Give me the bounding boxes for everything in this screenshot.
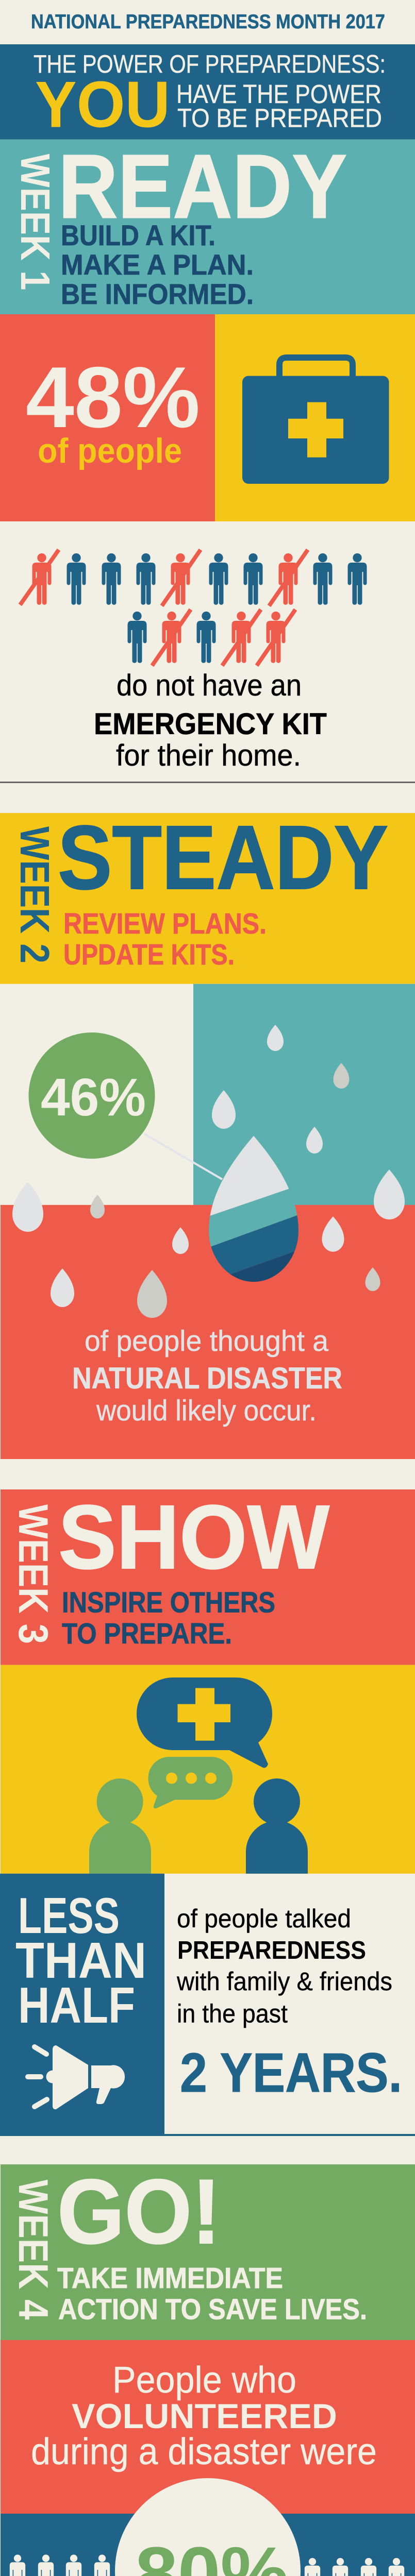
text: preparedness: PREPAREDNESS: [177, 1937, 366, 1964]
text: in the past: in the past: [177, 1999, 288, 2028]
icon: rain drops: [12, 1025, 405, 1318]
icon: small speech bubble: [148, 1757, 233, 1808]
stat: 80% circle: [115, 2478, 301, 2576]
chart: segmented big drop: [209, 1136, 298, 1282]
text: take immediate: TAKE IMMEDIATE: [57, 2262, 283, 2295]
text: volunteered: VOLUNTEERED: [72, 2397, 337, 2436]
text: of people: of people: [38, 431, 182, 470]
heading: show: SHOW: [58, 1487, 329, 1588]
panel: kit icon: [215, 314, 415, 521]
text: less: LESS: [18, 1887, 120, 1944]
panel: week 3 show: [1, 1487, 415, 1665]
stat: 46% circle: [29, 1032, 155, 1159]
text: natural disaster: NATURAL DISASTER: [72, 1362, 342, 1395]
text: build a kit: BUILD A KIT.: [61, 219, 215, 251]
heading: go: GO!: [57, 2160, 221, 2263]
heading: steady: STEADY: [58, 807, 388, 908]
text: emergency kit: EMERGENCY KIT: [94, 707, 327, 741]
text: half: HALF: [18, 1977, 135, 2033]
chart: row 2 of people: [128, 609, 295, 666]
icon: left people: [10, 2554, 110, 2576]
text: during a disaster were: during a disaster were: [31, 2431, 377, 2472]
panel: week 4 go: [1, 2160, 415, 2340]
text: for their home: for their home.: [116, 739, 301, 772]
icon: green person: [89, 1778, 151, 1874]
text: of people talked: of people talked: [177, 1904, 351, 1933]
text: update kits: UPDATE KITS.: [63, 938, 235, 971]
panel: 80 percent band: [1, 2478, 415, 2576]
text: of people thought a: of people thought a: [85, 1325, 328, 1358]
panel: power of preparedness banner: [0, 44, 415, 141]
text: would likely occur: would likely occur.: [96, 1394, 317, 1427]
panel: volunteers statement: [1, 2340, 415, 2514]
label: week 3: WEEK 3: [10, 1504, 56, 1644]
panel: week 1 ready: [0, 136, 415, 314]
panel: 48 percent: [0, 314, 215, 521]
text: to be prepared: TO BE PREPARED: [177, 103, 382, 133]
text: inspire others: INSPIRE OTHERS: [62, 1586, 275, 1619]
heading: you: YOU: [35, 68, 170, 141]
panel: natural disaster statistic: [1, 984, 415, 1459]
text: people who: People who: [112, 2360, 296, 2401]
text: to prepare: TO PREPARE.: [62, 1617, 232, 1650]
icon: right people: [305, 2558, 404, 2576]
icon: emergency kit: [242, 358, 389, 484]
text: be informed: BE INFORMED.: [61, 278, 254, 310]
panel: conversation illustration: [1, 1665, 415, 1874]
label: week 4: WEEK 4: [10, 2180, 56, 2320]
label: week 2: WEEK 2: [12, 826, 58, 963]
stat: 48%: 48%: [26, 349, 200, 446]
text: with family and friends: with family & friends: [176, 1967, 392, 1996]
text: do not have an: do not have an: [117, 669, 302, 702]
panel: emergency kit statistic: [20, 550, 367, 772]
text: review plans: REVIEW PLANS.: [63, 907, 267, 940]
text: than: THAN: [15, 1932, 146, 1989]
label: week 1: WEEK 1: [12, 154, 58, 291]
chart: row 1 of people: [20, 550, 367, 606]
text: have the power: HAVE THE POWER: [176, 79, 381, 109]
heading: ready: READY: [58, 136, 347, 237]
icon: large speech bubble: [137, 1677, 272, 1768]
text: make a plan: MAKE A PLAN.: [61, 248, 254, 281]
stat: 46% circle: 46%: [41, 1067, 146, 1127]
panel: week 2 steady: [0, 807, 415, 984]
text: action to save lives: ACTION TO SAVE LIVES.: [58, 2293, 367, 2326]
icon: megaphone: [28, 2045, 125, 2109]
panel: less than half: [0, 1874, 415, 2136]
icon: blue person: [246, 1778, 308, 1874]
